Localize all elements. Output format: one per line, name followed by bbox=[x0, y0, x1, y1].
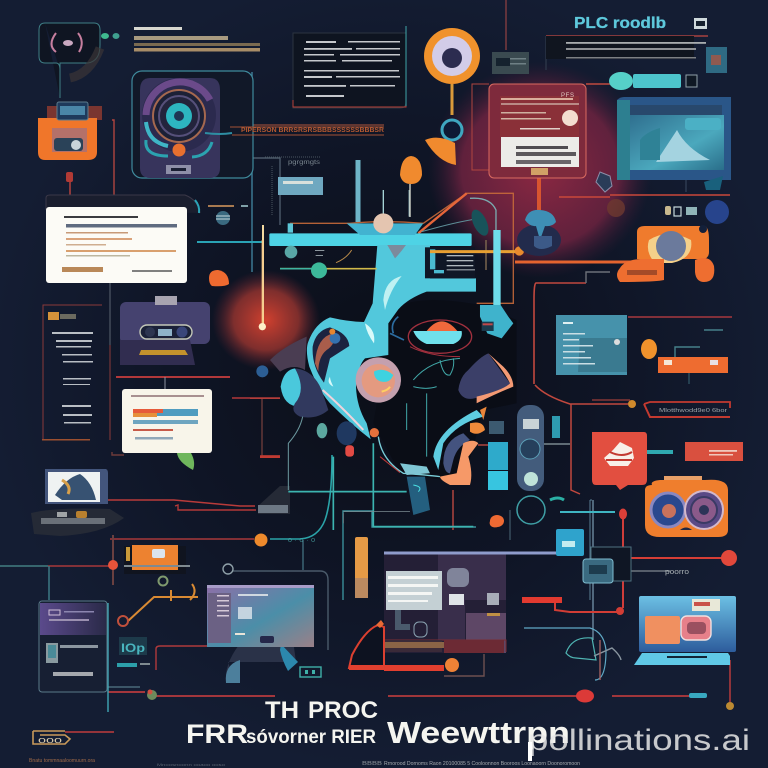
remote control device bbox=[517, 405, 560, 491]
node text label: poorro bbox=[665, 569, 689, 576]
circuit inset bbox=[425, 247, 475, 278]
top-right heading: PLC roodlb bbox=[574, 15, 666, 32]
panel: top text panel bbox=[293, 26, 406, 108]
footer text left: Bnatu tommnaaloomuurn.ora bbox=[29, 758, 96, 764]
icon: small badge and label bbox=[208, 205, 248, 225]
orange ball and bar bbox=[641, 339, 728, 373]
monitor: mountain landscape bbox=[617, 97, 731, 180]
antenna stem bbox=[383, 190, 409, 220]
green node bbox=[280, 266, 377, 271]
cheek cyan vertical bbox=[493, 230, 501, 305]
antenna knob bbox=[373, 213, 393, 233]
panel: left text column bbox=[42, 305, 110, 440]
orange circle node: O·O·O bbox=[288, 538, 315, 544]
teal badge bbox=[117, 637, 150, 667]
photo thumbnail bbox=[45, 469, 108, 504]
cyan bar bbox=[269, 233, 472, 246]
footer text left bbox=[29, 758, 383, 767]
central head illustration bbox=[250, 190, 524, 530]
left ear lumps bbox=[281, 368, 305, 407]
monitor: central lower bbox=[207, 585, 314, 683]
mini dashboard panel: pgrgmgts bbox=[288, 160, 320, 166]
card: orange mini device bbox=[124, 545, 190, 574]
panel: camera lens card bbox=[132, 71, 253, 178]
mouth and chin bbox=[433, 410, 483, 470]
top-right text block bbox=[546, 36, 706, 59]
beam and light node bbox=[260, 240, 266, 325]
red app icon bbox=[592, 432, 647, 490]
top wire panel bbox=[290, 193, 513, 303]
cyan link bar bbox=[647, 450, 673, 454]
title: TH bbox=[265, 697, 299, 724]
laptop bbox=[634, 596, 736, 665]
tilted badge bbox=[596, 172, 612, 192]
panel: teal text card bbox=[556, 315, 627, 375]
bottom-left tag: ooo bbox=[38, 735, 62, 745]
icon: orange blob left bbox=[209, 270, 229, 286]
small icon row bbox=[665, 200, 729, 224]
magenta glow behind red panel bbox=[428, 62, 652, 278]
icon: small red lamp bbox=[66, 172, 73, 182]
orange diamond node bbox=[108, 560, 118, 570]
small app icon bbox=[706, 47, 727, 73]
top-left text block bbox=[134, 27, 260, 52]
ear disc bbox=[356, 357, 401, 403]
orange blob lower centre bbox=[490, 515, 504, 527]
title bbox=[186, 697, 570, 750]
mushroom icon bbox=[517, 210, 561, 256]
panel: purple dashboard bbox=[39, 601, 107, 692]
orange link glyph bbox=[118, 576, 198, 626]
cyan trunk and ear mass bbox=[307, 245, 476, 439]
small gateway box bbox=[492, 52, 529, 74]
orange camera bbox=[645, 476, 728, 537]
multi-coloured node bbox=[147, 690, 157, 700]
bottom-left tag bbox=[33, 731, 70, 745]
panel: white chart card bbox=[122, 389, 212, 470]
panel: red document bbox=[489, 84, 586, 178]
panel: purple camera card bbox=[120, 296, 210, 365]
title: FRR bbox=[186, 719, 248, 749]
icon: gear node bbox=[223, 564, 233, 574]
teal badge: IOp bbox=[121, 641, 145, 655]
mesh shoulder bbox=[270, 337, 307, 372]
icon: orange balloon bbox=[400, 156, 422, 217]
footer text left: BBBB bbox=[362, 761, 383, 767]
dark face base bbox=[373, 300, 517, 483]
footer text right: Rrnorood Dornoms Raon 20100085 5 Cooloonnon Booroos Loonaoorn Doonoromoon bbox=[384, 761, 580, 767]
mesh tag bbox=[258, 486, 290, 514]
cyan blocks bbox=[488, 421, 508, 490]
face eye bbox=[408, 320, 472, 353]
terminal nodes bbox=[576, 690, 734, 710]
title: Weewttrpn bbox=[387, 715, 570, 750]
vertical tan card bbox=[355, 537, 368, 598]
icon: eye on orange ring bbox=[424, 28, 480, 165]
watermark: pollinations.ai bbox=[528, 724, 750, 757]
stand shadow bbox=[607, 176, 723, 217]
footer text left: Mnoosnoonn ooaoo ooso bbox=[157, 762, 226, 767]
outlined chip stack bbox=[583, 547, 631, 583]
red glow left of head bbox=[212, 270, 320, 370]
tag: outlined label bbox=[628, 400, 730, 417]
teal outlined tag bbox=[300, 667, 321, 677]
lower monitor right of centre bbox=[384, 553, 560, 653]
face wires bbox=[407, 358, 460, 457]
panel: white text card bbox=[46, 195, 200, 283]
panel: lens icon top-left bbox=[39, 23, 120, 98]
node: red pin and line bbox=[522, 508, 737, 615]
red triangle lamp bbox=[349, 620, 384, 670]
title: PROC bbox=[308, 697, 378, 724]
ear cavity bbox=[313, 327, 349, 383]
icon: orange device bbox=[38, 102, 102, 160]
title: sóvorner RIER bbox=[246, 727, 376, 748]
red info tag bbox=[685, 442, 743, 461]
neck shapes bbox=[288, 443, 473, 530]
red bar node bbox=[384, 658, 459, 672]
mini dashboard panel bbox=[265, 157, 358, 222]
mesh ship graphic bbox=[31, 508, 124, 536]
blue small card bbox=[556, 529, 584, 556]
orange circle node bbox=[254, 534, 315, 546]
nose bbox=[458, 353, 510, 399]
panel: red document: PFS bbox=[561, 93, 574, 99]
panel: orange device right bbox=[617, 225, 714, 282]
circle outline and small glyphs bbox=[517, 496, 615, 524]
bright ear stroke bbox=[323, 390, 363, 430]
tag: outlined label: Mlotthwodd9e0 6bor bbox=[659, 408, 727, 414]
banner: orange data strip: PIPERSON BRRSRSRSBBBSSSSSSBBBSR bbox=[241, 127, 384, 134]
cyan pill bbox=[609, 72, 697, 90]
top-right heading bbox=[574, 15, 707, 32]
